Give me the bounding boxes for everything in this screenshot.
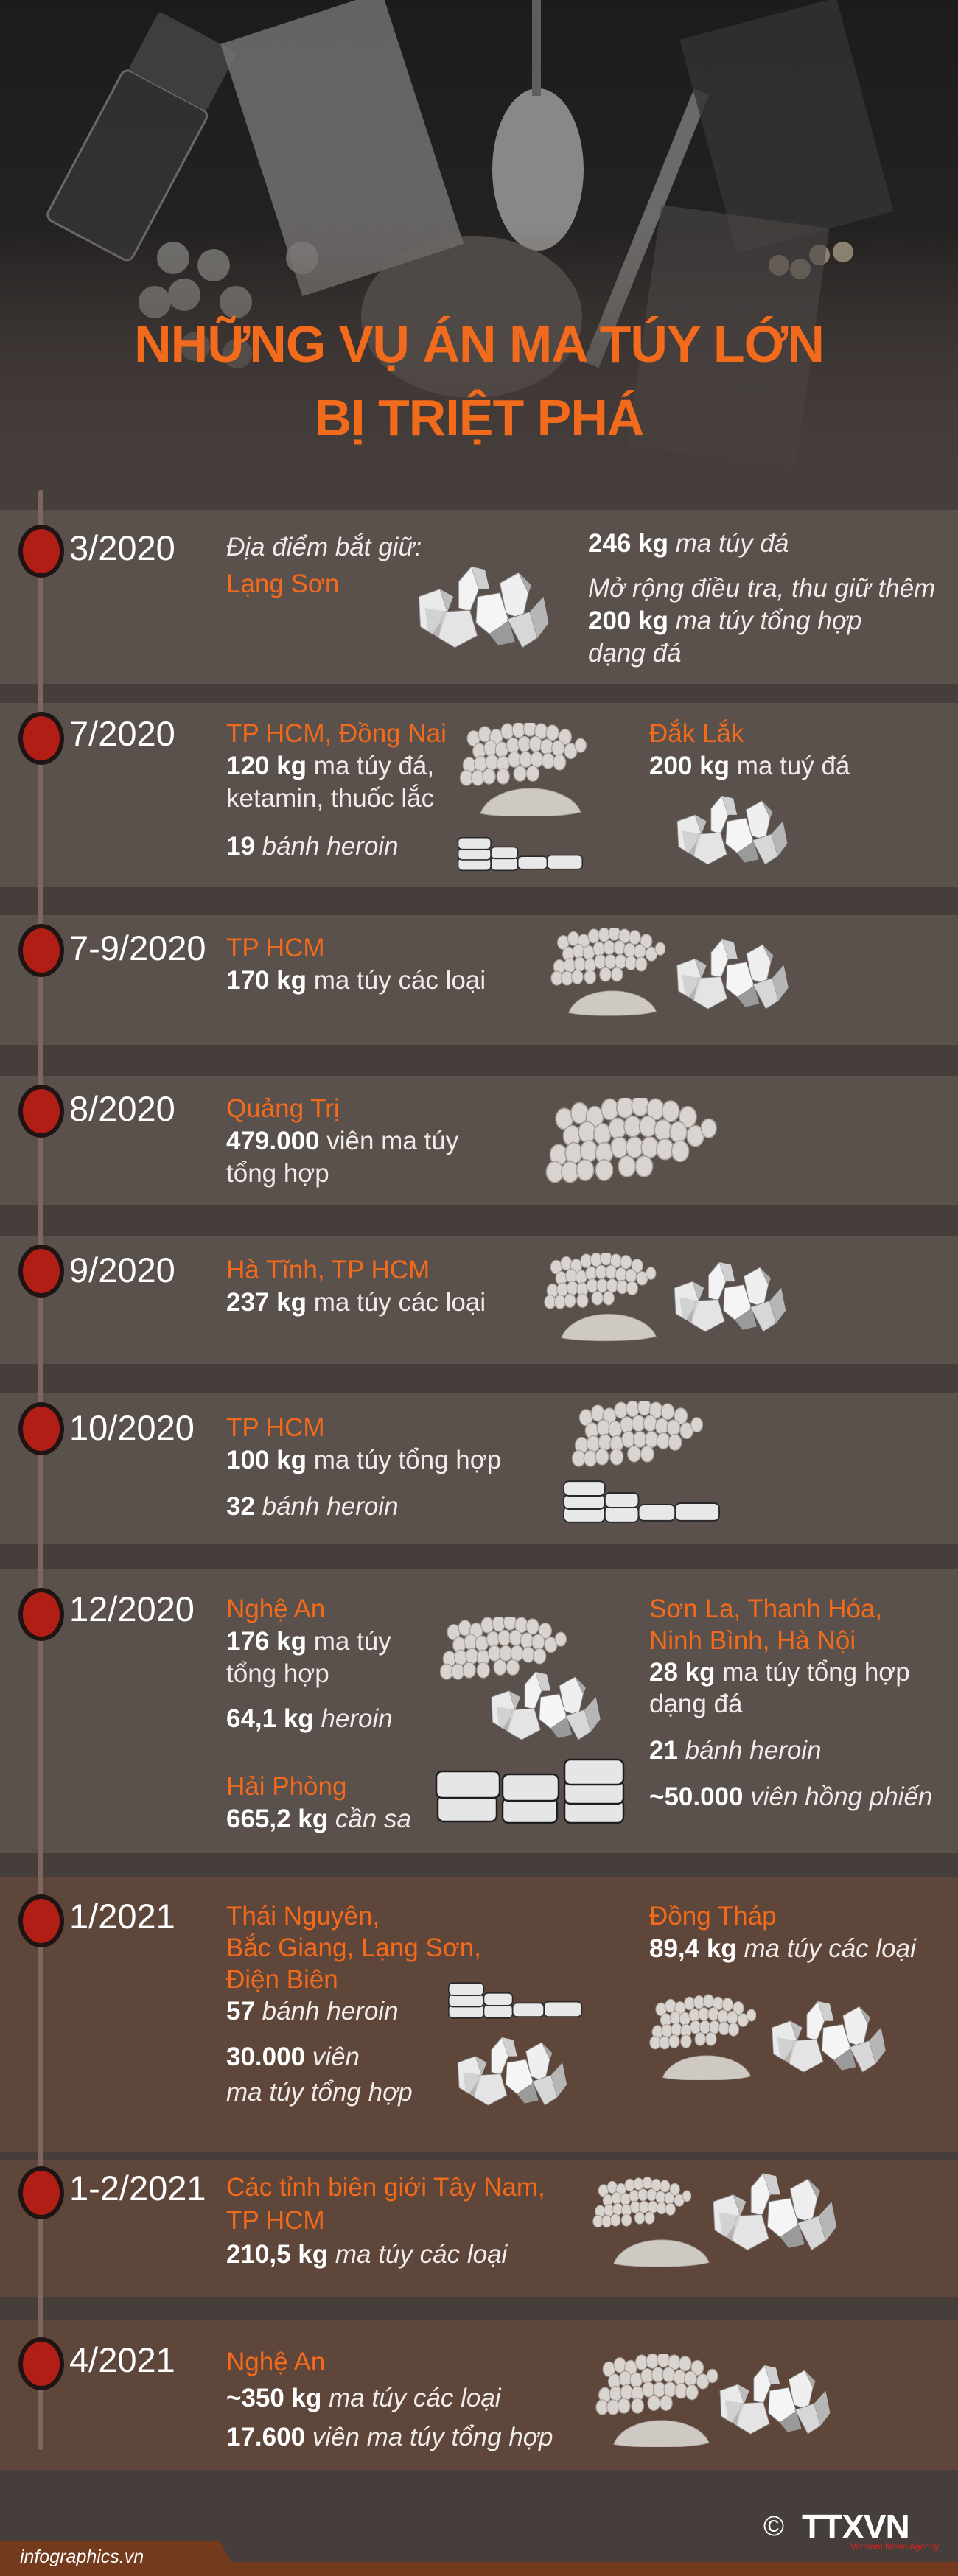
text: TP HCM <box>226 934 325 962</box>
panel: 3/2020: dạng đá <box>588 639 682 668</box>
left text: Nghệ An <box>226 1595 325 1623</box>
panel: 3/2020: Mở rộng điều tra, thu giữ thêm <box>588 574 935 603</box>
date: 9/2020 <box>69 1250 175 1289</box>
left text <box>226 1595 391 1688</box>
text: ~350 kg ma túy các loại <box>226 2384 501 2412</box>
text: Các tỉnh biên giới Tây Nam, <box>226 2173 545 2202</box>
dot <box>18 525 64 578</box>
text <box>226 934 486 995</box>
text <box>226 1094 458 1188</box>
title <box>134 315 824 447</box>
footer logo: TTXVN: Vietnam News Agency <box>850 2541 939 2552</box>
text <box>226 719 447 813</box>
text: tổng hợp <box>226 1159 329 1188</box>
panel: 1/2021: 30.000 viên <box>226 2043 360 2071</box>
panel: 12/2020: 665,2 kg cần sa <box>226 1805 411 1833</box>
title: NHỮNG VỤ ÁN MA TÚY LỚN <box>134 315 824 373</box>
icons <box>572 1401 703 1467</box>
left text: Thái Nguyên, <box>226 1902 380 1931</box>
panel: 1/2021: 57 bánh heroin <box>226 1997 399 2026</box>
panel: 1-2/2021 <box>0 2160 958 2297</box>
text <box>226 1413 501 1474</box>
left text <box>226 1902 481 1994</box>
right: 200 kg ma tuý đá <box>649 752 850 780</box>
source text: infographics.vn <box>20 2547 144 2567</box>
date: 7/2020 <box>69 714 175 753</box>
date: 8/2020 <box>69 1089 175 1128</box>
timeline line <box>38 490 43 2450</box>
panel: 12/2020: 21 bánh heroin <box>649 1736 822 1765</box>
date: 7-9/2020 <box>69 928 206 967</box>
icons <box>439 1617 567 1680</box>
footer logo: TTXVN: © <box>763 2511 784 2542</box>
icon: crystals <box>676 796 787 865</box>
panel: 12/2020: ~50.000 viên hồng phiến <box>649 1782 932 1811</box>
icons <box>544 1253 656 1309</box>
right text: dạng đá <box>649 1690 743 1718</box>
panel: 3/2020 <box>0 510 958 684</box>
right text: 89,4 kg ma túy các loại <box>649 1934 916 1963</box>
footer logo: TTXVN <box>763 2507 939 2552</box>
date: 10/2020 <box>69 1408 195 1447</box>
panel: 1-2/2021: 210,5 kg ma túy các loại <box>226 2240 507 2269</box>
date: 12/2020 <box>69 1589 195 1628</box>
panel: 12/2020: 64,1 kg heroin <box>226 1704 393 1733</box>
right text: Sơn La, Thanh Hóa, <box>649 1595 882 1623</box>
icon: crystals <box>419 567 548 648</box>
header photo <box>0 0 958 508</box>
icon: mound <box>480 788 581 816</box>
text: 100 kg ma túy tổng hợp <box>226 1446 501 1474</box>
date: 1/2021 <box>69 1897 175 1936</box>
text: TP HCM <box>226 2206 325 2235</box>
left text: 176 kg ma túy <box>226 1627 391 1656</box>
right icons <box>649 1994 756 2050</box>
icons <box>448 1982 582 2019</box>
text: Hà Tĩnh, TP HCM <box>226 1256 430 1284</box>
icons <box>595 2354 718 2415</box>
text: TP HCM, Đồng Nai <box>226 719 447 748</box>
right text: 28 kg ma túy tổng hợp <box>649 1658 910 1687</box>
panel: 10/2020: 32 bánh heroin <box>226 1492 399 1521</box>
icon: bricks <box>457 837 583 871</box>
location: Địa điểm bắt giữ: <box>226 533 422 561</box>
icons <box>550 928 665 986</box>
panel: 1/2021 <box>0 1877 958 2152</box>
text: Nghệ An <box>226 2348 325 2376</box>
title: BỊ TRIỆT PHÁ <box>315 389 643 447</box>
left text: tổng hợp <box>226 1659 329 1688</box>
date: 1-2/2021 <box>69 2169 206 2208</box>
date: 3/2020 <box>69 528 175 567</box>
panel: 8/2020 <box>0 1076 958 1205</box>
icon: pills <box>460 723 587 786</box>
text: TP HCM <box>226 1413 325 1442</box>
icons <box>592 2177 691 2228</box>
text: 120 kg ma túy đá, <box>226 752 434 780</box>
panel: 7/2020: 19 bánh heroin <box>226 832 399 861</box>
panel: 12/2020: Hải Phòng <box>226 1772 346 1801</box>
left text: Điện Biên <box>226 1965 338 1994</box>
footer logo: TTXVN: TTXVN <box>802 2507 909 2546</box>
text <box>226 1256 486 1317</box>
location <box>226 533 422 598</box>
panel: 12/2020 <box>0 1569 958 1853</box>
panel: 7/2020 <box>0 703 958 887</box>
right text <box>649 1902 917 1963</box>
date: 4/2021 <box>69 2340 175 2379</box>
text: Quảng Trị <box>226 1094 340 1123</box>
panel: 9/2020 <box>0 1236 958 1364</box>
footer bar <box>0 2541 958 2576</box>
details: 246 kg ma túy đá <box>588 529 789 558</box>
right text <box>649 1595 910 1718</box>
text <box>226 2348 501 2412</box>
right text: Ninh Bình, Hà Nội <box>649 1626 856 1655</box>
panel: 7-9/2020 <box>0 915 958 1045</box>
text: 479.000 viên ma túy <box>226 1127 458 1155</box>
dot <box>18 712 64 765</box>
panel: 4/2021 <box>0 2320 958 2470</box>
panel: 10/2020 <box>0 1393 958 1544</box>
text <box>226 2173 545 2235</box>
left text: Bắc Giang, Lạng Sơn, <box>226 1933 481 1962</box>
panel: 4/2021: 17.600 viên ma túy tổng hợp <box>226 2423 553 2451</box>
text: ketamin, thuốc lắc <box>226 784 434 813</box>
text: 170 kg ma túy các loại <box>226 966 486 995</box>
location: Lạng Sơn <box>226 570 339 598</box>
panel: 1/2021: ma túy tổng hợp <box>226 2078 413 2107</box>
right: Đắk Lắk <box>649 719 744 748</box>
text: 237 kg ma túy các loại <box>226 1288 486 1317</box>
icon: pills <box>545 1098 717 1183</box>
right text: Đồng Tháp <box>649 1902 777 1931</box>
panel: 3/2020: 200 kg ma túy tổng hợp <box>588 606 861 635</box>
right <box>649 719 850 780</box>
